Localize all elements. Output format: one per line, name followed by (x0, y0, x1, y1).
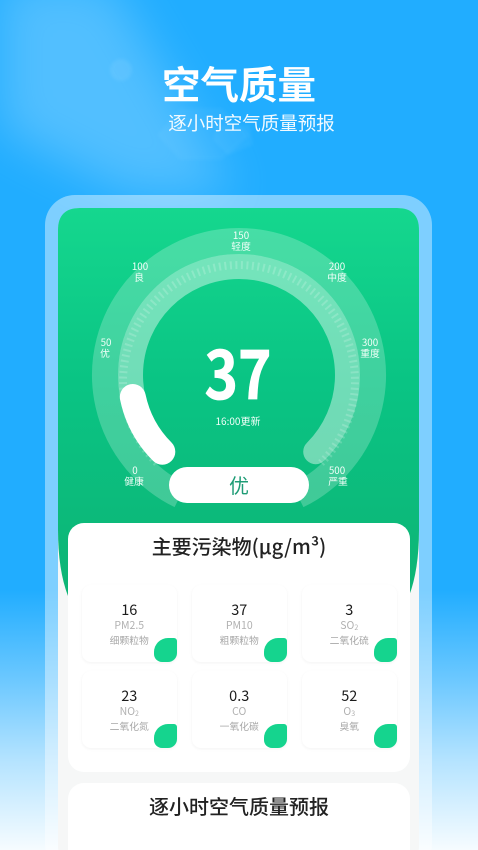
device frame (45, 195, 432, 850)
gauge scale labels: 500 (329, 463, 345, 477)
pollutant PM2.5: PM2.5 (114, 618, 144, 633)
pollutant PM2.5 (82, 585, 176, 662)
gauge scale labels: 良 (134, 270, 144, 284)
pollutant CO: 一氧化碳 (220, 719, 259, 733)
gauge scale labels: 0 (132, 463, 138, 477)
panel: main pollutants (68, 523, 410, 772)
gauge ticks (123, 265, 355, 463)
gauge scale labels: 150 (233, 228, 249, 242)
gauge inner ring (130, 266, 348, 452)
pollutant PM10: 37 (231, 599, 247, 620)
pollutant O3: 52 (341, 685, 357, 706)
pollutant CO: 0.3 (229, 685, 249, 706)
pollutant SO2: 二氧化硫 (330, 633, 369, 647)
gauge outer ring (105, 241, 373, 496)
gauge scale labels: 严重 (328, 474, 348, 488)
pollutant O3 (302, 671, 396, 748)
green panel background (58, 208, 419, 596)
quality pill (169, 467, 309, 503)
subtitle: 逐小时空气质量预报 (168, 110, 335, 136)
update time: 16:00更新 (216, 413, 260, 428)
pollutant CO: CO (232, 704, 246, 719)
pollutant SO2 (302, 585, 396, 662)
pollutant O3: 臭氧 (339, 719, 359, 733)
pollutant NO2: 二氧化氮 (110, 719, 149, 733)
gauge scale labels: 轻度 (231, 239, 251, 253)
gauge scale labels: 200 (329, 259, 345, 273)
gauge scale labels: 100 (132, 259, 148, 273)
pollutant NO2 (82, 671, 176, 748)
quality pill: 优 (229, 470, 249, 499)
panel: hourly forecast (68, 783, 410, 850)
pollutant PM2.5: 16 (121, 599, 137, 620)
gauge scale labels: 中度 (327, 270, 347, 284)
pollutant O3: O3 (343, 704, 355, 719)
gauge scale labels: 重度 (360, 346, 380, 360)
pollutants heading: 主要污染物(μg/m³) (152, 531, 326, 560)
pollutant NO2: 23 (121, 685, 137, 706)
inner panel (58, 208, 419, 850)
forecast heading: 逐小时空气质量预报 (149, 791, 329, 820)
pollutant SO2: SO2 (340, 618, 358, 633)
AQI value: 37 (204, 323, 272, 419)
gauge value arc (133, 397, 162, 452)
pollutant SO2: 3 (345, 599, 353, 620)
pollutant PM10: PM10 (226, 618, 253, 633)
gauge scale labels: 健康 (124, 474, 144, 488)
pollutant PM10: 粗颗粒物 (220, 633, 259, 647)
gauge scale labels (100, 228, 380, 488)
gauge scale labels: 50 (101, 335, 111, 349)
background light rays and bokeh (0, 0, 251, 206)
pollutant NO2: NO2 (120, 704, 139, 719)
pollutant PM2.5: 细颗粒物 (110, 633, 149, 647)
title: 空气质量 (162, 55, 316, 111)
gauge scale labels: 300 (362, 335, 378, 349)
pollutant CO (192, 671, 286, 748)
gauge scale labels: 优 (100, 346, 110, 360)
pollutant PM10 (192, 585, 286, 662)
